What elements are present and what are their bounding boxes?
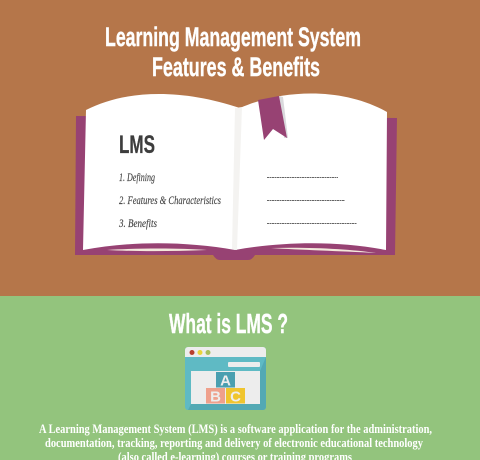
blocks: A	[220, 372, 231, 390]
blocks	[206, 372, 245, 406]
bookmark ribbon	[258, 96, 288, 140]
window shade	[188, 357, 266, 410]
title bar	[185, 347, 266, 357]
heading: What is LMS: What is LMS ?	[169, 308, 288, 339]
illustration: open book	[75, 93, 397, 260]
text block: LMS definition	[39, 421, 432, 460]
book heading LMS: LMS	[119, 131, 155, 159]
blocks: B	[210, 388, 221, 406]
table of contents	[118, 170, 221, 230]
panel: brown header background	[0, 0, 480, 296]
title	[105, 22, 361, 82]
window controls	[190, 350, 194, 355]
dashed leader lines	[267, 178, 357, 224]
window body	[185, 347, 266, 410]
book spine fold	[232, 107, 242, 250]
title: Features & Benefits	[152, 52, 320, 82]
content pane	[191, 371, 260, 404]
blocks: C	[230, 388, 241, 406]
search bar	[228, 362, 260, 367]
table of contents: 2. Features & Characteristics	[119, 193, 221, 207]
table of contents: 1. Defining	[119, 170, 155, 184]
page underside highlights	[107, 248, 376, 253]
icon: browser window with ABC blocks	[185, 347, 266, 410]
table of contents: 3. Benefits	[118, 216, 157, 230]
book pages	[83, 93, 387, 250]
book cover	[75, 116, 397, 260]
panel: green section background	[0, 296, 480, 460]
